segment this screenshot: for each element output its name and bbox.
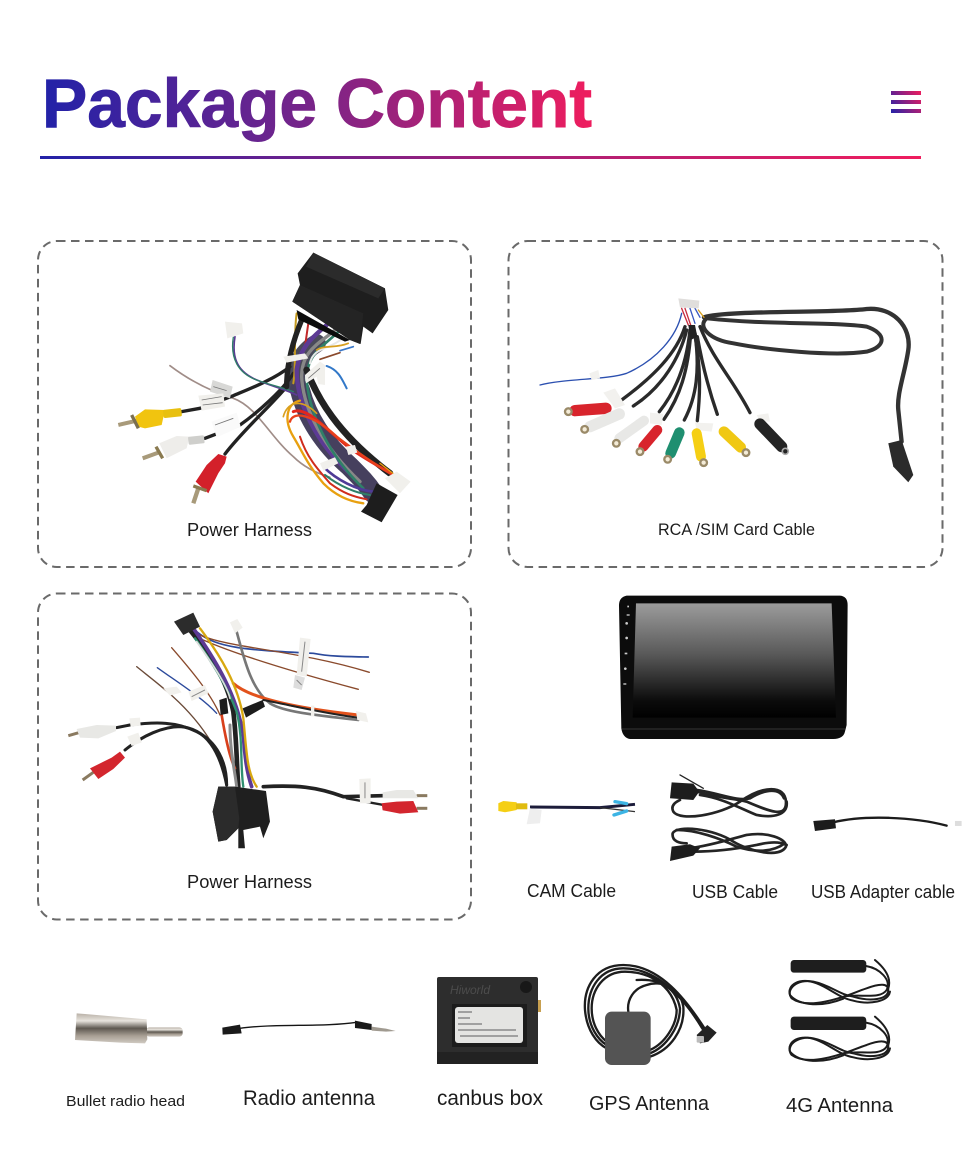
icon: menu — [891, 91, 921, 113]
4g antenna — [786, 960, 894, 1117]
label: usb adapter cable: USB Adapter cable — [811, 882, 955, 902]
left red rca — [83, 752, 125, 780]
gps antenna — [585, 965, 717, 1115]
label: gps antenna: GPS Antenna — [589, 1093, 710, 1115]
title: Package Content — [42, 65, 592, 142]
screen side buttons — [623, 606, 630, 685]
top connector — [174, 613, 200, 635]
yellow female rca — [697, 433, 701, 457]
label: bullet radio head: Bullet radio head — [66, 1093, 185, 1110]
label: usb cable: USB Cable — [692, 882, 778, 902]
bullet radio head — [66, 1013, 185, 1110]
white rca — [143, 435, 205, 458]
canbus box — [437, 977, 543, 1110]
yellow female rca 2 — [724, 432, 741, 447]
harness 1 drawing — [118, 253, 411, 522]
bullet drawing — [75, 1013, 183, 1043]
small inline connectors — [219, 698, 265, 718]
cam cable — [498, 801, 635, 901]
red female rca 2 — [643, 430, 657, 447]
canbus drawing: Hiworld — [450, 983, 490, 997]
red female rca — [575, 408, 606, 411]
cam cable drawing — [498, 801, 635, 824]
label: 4g antenna: 4G Antenna — [786, 1095, 894, 1117]
label: rca sim card cable: RCA /SIM Card Cable — [658, 520, 815, 539]
header rule — [40, 156, 921, 159]
iso connector — [213, 787, 270, 848]
head unit screen — [619, 596, 848, 739]
left white rca — [68, 725, 116, 738]
usb cable drawing — [670, 775, 787, 861]
antenna drawing — [222, 1021, 396, 1035]
radio antenna — [222, 1021, 396, 1110]
main connector — [292, 253, 388, 344]
label: canbus box: canbus box — [437, 1087, 543, 1110]
4g antennas drawing — [789, 960, 890, 1061]
white female rca 2 — [619, 421, 644, 438]
sim box — [888, 440, 913, 482]
usb adapter cable drawing — [813, 818, 962, 831]
label: cam cable: CAM Cable — [527, 881, 616, 901]
panel: power harness 2 — [38, 594, 471, 920]
gps drawing — [585, 965, 717, 1065]
small end connector — [361, 483, 398, 522]
right red rca — [382, 801, 427, 814]
white clips and labels — [198, 322, 411, 493]
red rca — [193, 454, 227, 503]
green female rca — [671, 433, 679, 453]
white female rca — [590, 414, 619, 427]
white clips and tags — [127, 619, 371, 803]
panel: power harness 1 — [38, 241, 471, 567]
panel: rca sim card cable — [508, 241, 942, 567]
tags — [589, 370, 770, 432]
audio jack — [760, 424, 782, 447]
yellow rca — [118, 408, 182, 428]
label: power harness: Power Harness — [187, 872, 312, 892]
usb cable — [670, 775, 787, 902]
usb adapter cable — [811, 818, 962, 902]
right white rca — [383, 790, 427, 798]
label: radio antenna: Radio antenna — [243, 1087, 375, 1110]
label: power harness: Power Harness — [187, 520, 312, 540]
white connector — [678, 298, 699, 308]
rca cable drawing — [540, 298, 913, 482]
harness 2 drawing — [68, 613, 427, 848]
